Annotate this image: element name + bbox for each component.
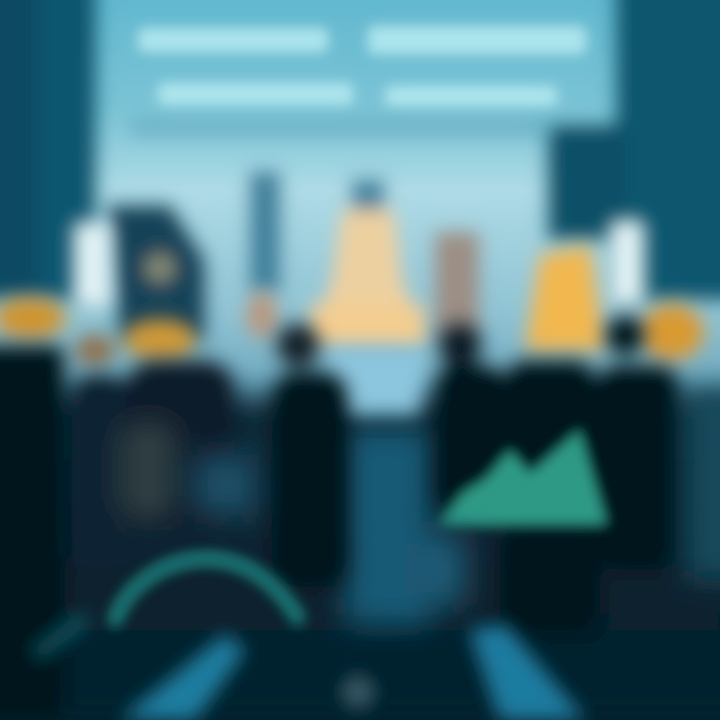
faded brown figure (118, 420, 178, 520)
green arc line (115, 559, 298, 620)
skyline: left building (108, 205, 205, 340)
skyline: slim tower (250, 172, 280, 292)
left dark tower (0, 0, 96, 300)
bottom center dot (342, 676, 374, 708)
green area chart (438, 428, 608, 525)
golden building right (525, 245, 605, 350)
lower-left arc tail (35, 618, 85, 655)
bottom left blue light streak (120, 635, 245, 720)
sky background (0, 0, 720, 420)
skyline: right of center tower (435, 232, 479, 337)
ground background (0, 395, 720, 720)
silhouettes of people (0, 315, 680, 720)
gold highlights (0, 291, 704, 366)
central aisle (345, 430, 430, 625)
skyline: central domed building (306, 180, 428, 345)
right dark tower (548, 0, 720, 300)
lower-left blue haze (195, 455, 255, 515)
center-right blue haze (405, 535, 465, 605)
right edge figure (685, 390, 720, 580)
subtitle band (130, 120, 550, 136)
title placeholder bars (138, 26, 586, 106)
white window glows (74, 220, 644, 307)
central light blue document (322, 350, 428, 415)
bottom right blue light streak (470, 625, 585, 720)
